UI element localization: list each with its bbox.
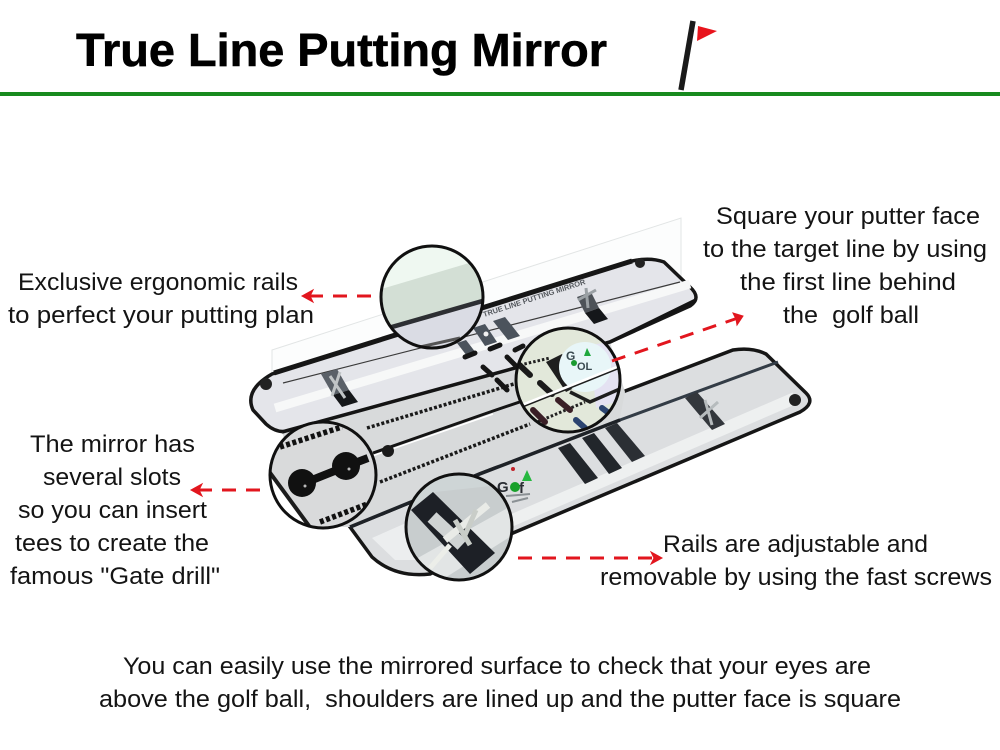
rail slats bbox=[321, 288, 608, 407]
text: mirror slots: several slots bbox=[43, 464, 181, 491]
arrow: rails callout bbox=[302, 290, 371, 302]
icon: golf flag bbox=[681, 21, 717, 90]
text: square putter face: Square your putter face bbox=[716, 203, 980, 230]
magnifier: golf ball on target line: G bbox=[566, 349, 575, 363]
text: mirror slots: so you can insert bbox=[18, 497, 207, 524]
magnifier: fast screw bbox=[405, 473, 513, 581]
text: mirror slots: tees to create the bbox=[15, 530, 209, 557]
text: mirror slots: famous "Gate drill" bbox=[10, 563, 220, 590]
arrow: slots callout bbox=[191, 484, 260, 496]
text: mirror slots: The mirror has bbox=[30, 431, 195, 458]
magnifier: ergonomic rail bbox=[380, 244, 484, 350]
text: ergonomic rails: Exclusive ergonomic rails bbox=[18, 269, 298, 296]
text: adjustable rails: removable by using the fast screws bbox=[600, 564, 992, 591]
text: ergonomic rails bbox=[8, 269, 314, 329]
title: True Line Putting Mirror bbox=[76, 24, 607, 76]
text: mirrored surface note: above the golf ball, shoulders are lined up and the putter face is square bbox=[99, 686, 901, 713]
text: square putter face: the golf ball bbox=[783, 302, 919, 329]
text: adjustable rails bbox=[600, 531, 992, 591]
logo on rail: f bbox=[519, 480, 525, 497]
text: mirrored surface note: You can easily use the mirrored surface to check that your eyes are bbox=[123, 653, 871, 680]
upper rail bbox=[251, 258, 696, 432]
putting mirror product bbox=[251, 218, 810, 581]
header divider bbox=[0, 92, 1000, 96]
text: square putter face: to the target line by using bbox=[703, 236, 987, 263]
arrow: screws callout bbox=[518, 552, 662, 564]
lower rail bbox=[350, 349, 810, 575]
central mirror bbox=[282, 300, 696, 527]
text: mirror slots bbox=[10, 431, 220, 590]
text: square putter face: the first line behind bbox=[740, 269, 956, 296]
glass mirror plate bbox=[272, 218, 681, 420]
arrow: putter face callout bbox=[612, 313, 743, 361]
logo on rail: G bbox=[497, 479, 509, 496]
text: mirrored surface note bbox=[99, 653, 901, 713]
logo on rail bbox=[497, 467, 532, 502]
text: square putter face bbox=[703, 203, 987, 329]
magnifier: golf ball on target line bbox=[512, 327, 622, 433]
gate drill slots bbox=[465, 345, 533, 390]
magnifier: golf ball on target line: OL bbox=[577, 361, 593, 373]
magnifier: mirror slots bbox=[268, 420, 378, 530]
text: adjustable rails: Rails are adjustable and bbox=[663, 531, 928, 558]
text: ergonomic rails: to perfect your putting plan bbox=[8, 302, 314, 329]
lower rail slats bbox=[558, 392, 801, 484]
rail label: TRUE LINE PUTTING MIRROR bbox=[482, 277, 587, 319]
